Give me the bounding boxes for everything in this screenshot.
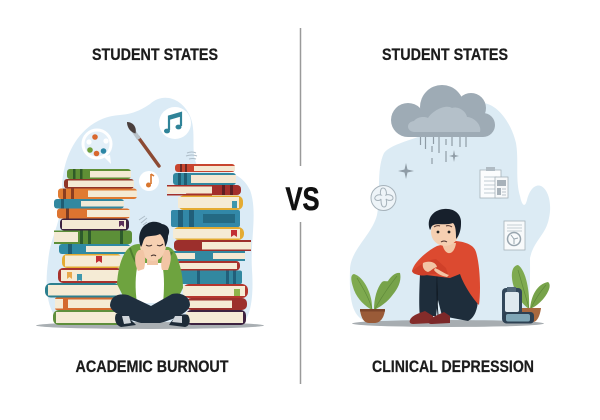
caption: clinical depression: CLINICAL DEPRESSION bbox=[372, 358, 534, 376]
stress lines bbox=[139, 216, 147, 225]
caption: academic burnout: ACADEMIC BURNOUT bbox=[76, 358, 228, 376]
left shoe bbox=[115, 314, 136, 327]
book bbox=[174, 240, 251, 251]
book bbox=[173, 227, 244, 240]
rain drops bbox=[420, 137, 466, 164]
crossed sleeve bbox=[412, 259, 449, 277]
trousers bbox=[419, 262, 478, 321]
right shoe bbox=[169, 314, 190, 327]
sad eyes and mouth bbox=[434, 226, 452, 242]
hood shading bbox=[130, 248, 172, 266]
book bbox=[54, 199, 124, 208]
figure: stressed student sitting cross-legged bbox=[110, 216, 190, 327]
book bbox=[173, 251, 245, 261]
book bbox=[178, 196, 243, 210]
panel: academic burnout illustration bbox=[36, 98, 264, 329]
chart: right book stack bbox=[167, 164, 251, 325]
left shoe bbox=[410, 311, 433, 324]
book bbox=[53, 310, 123, 325]
icon: music note bubble small bbox=[139, 171, 159, 191]
panel: clinical depression illustration bbox=[350, 85, 550, 327]
book bbox=[58, 188, 137, 199]
right shoe bbox=[429, 312, 450, 324]
red sweater bbox=[412, 241, 480, 305]
leg separator bbox=[437, 276, 438, 315]
book bbox=[58, 268, 122, 283]
background blob: left bbox=[47, 98, 254, 325]
icon: brain circle bbox=[371, 186, 396, 210]
hoodie bbox=[117, 244, 183, 302]
icon: large sparkle bbox=[398, 163, 414, 179]
icon: music note bubble large bbox=[159, 107, 191, 139]
book bbox=[176, 261, 240, 270]
neck bbox=[442, 243, 456, 253]
book bbox=[183, 284, 248, 298]
background blob: right bbox=[350, 103, 550, 322]
book bbox=[59, 244, 130, 254]
face bbox=[140, 229, 166, 261]
book bbox=[67, 169, 131, 179]
book bbox=[175, 164, 235, 172]
neck bbox=[147, 256, 158, 265]
book bbox=[64, 179, 134, 188]
icon: rain cloud bbox=[391, 85, 495, 164]
divider: vertical line bbox=[300, 28, 302, 384]
icon: small sparkle bbox=[449, 150, 459, 162]
hand bbox=[423, 262, 449, 277]
heading: left student states: STUDENT STATES bbox=[92, 46, 218, 64]
label: VS: VS bbox=[286, 181, 320, 217]
bottle and container bbox=[502, 287, 534, 324]
book bbox=[54, 230, 132, 244]
book bbox=[173, 173, 236, 185]
heading: right student states: STUDENT STATES bbox=[382, 46, 508, 64]
book bbox=[180, 270, 242, 284]
ground shadow: left bbox=[36, 322, 264, 329]
book bbox=[62, 254, 122, 268]
hair bbox=[429, 209, 461, 239]
hair bbox=[139, 222, 169, 247]
icon: palette speech bubble bbox=[83, 130, 111, 164]
ground shadow: right bbox=[352, 320, 544, 327]
book bbox=[45, 283, 120, 298]
plant: left potted plant bbox=[351, 273, 400, 323]
figure: sad student hugging knees bbox=[410, 209, 480, 324]
book bbox=[55, 298, 120, 310]
closed eyes and mouth bbox=[146, 244, 163, 256]
plant: right potted plant bbox=[512, 265, 550, 322]
book bbox=[171, 210, 240, 227]
book bbox=[186, 298, 247, 310]
book bbox=[167, 185, 241, 196]
white shirt bbox=[136, 263, 164, 303]
book bbox=[60, 218, 129, 230]
chart: left book stack bbox=[45, 169, 137, 325]
icon: clipboard documents bbox=[480, 167, 508, 198]
hands bbox=[135, 250, 171, 271]
face bbox=[431, 218, 459, 246]
icon: paint brush bbox=[127, 122, 159, 166]
book bbox=[186, 310, 246, 325]
legs bbox=[110, 294, 190, 323]
book bbox=[57, 208, 130, 218]
icon: stress lines top right bbox=[186, 152, 197, 159]
icon: report document bbox=[504, 221, 525, 250]
